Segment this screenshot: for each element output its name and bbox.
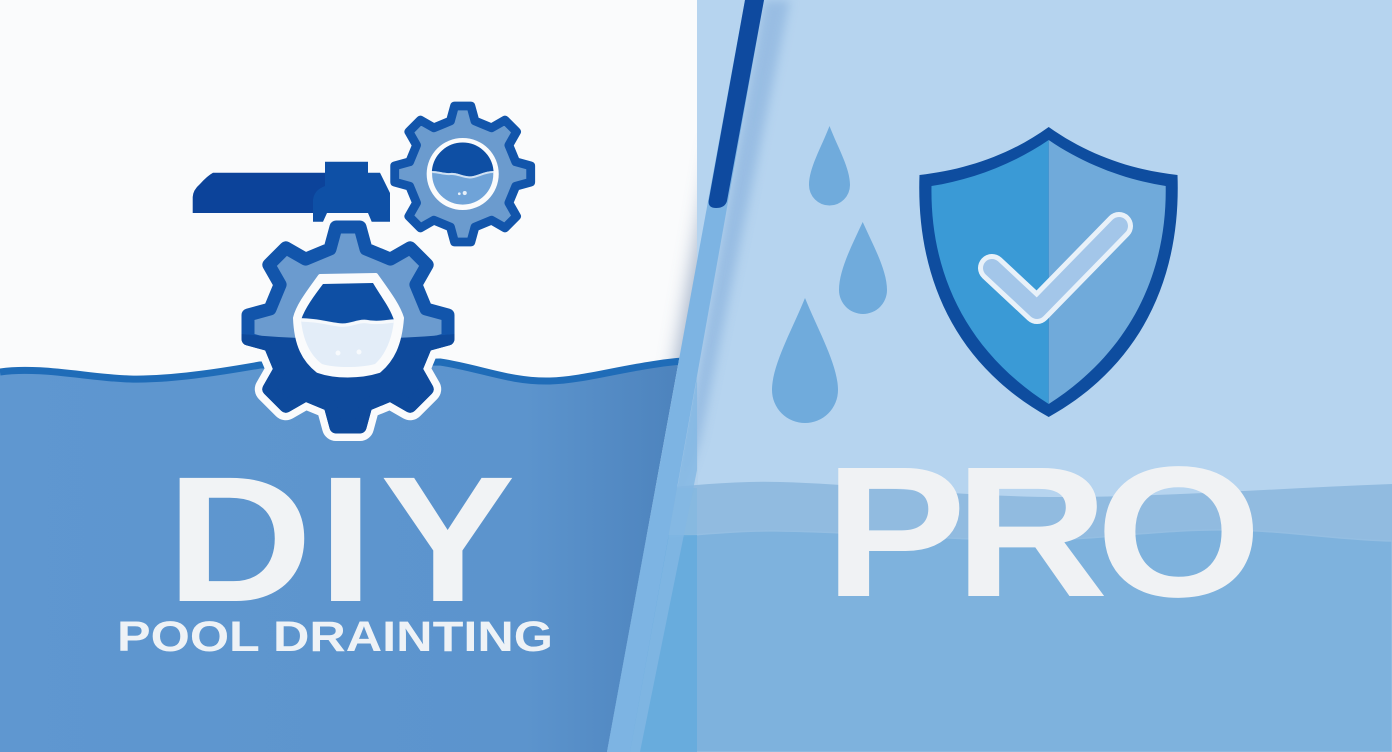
icon: shield with check [919,127,1178,417]
faint band strip [630,378,697,752]
small drop [809,126,850,206]
dark bar on divider [709,0,764,208]
check mark [992,226,1119,310]
valve body [313,162,390,222]
panel: DIY background [0,0,697,752]
lens bubbles [458,191,467,195]
title: DIY: DIY [166,439,516,639]
light water strip left of the panel seam [684,488,697,535]
gear lens ring [427,138,499,210]
lens white ring [295,275,402,376]
gear lower body [242,334,454,434]
diagonal divider band [607,0,764,752]
medium drop [839,222,887,314]
lens dark top [302,283,394,324]
lens water [301,318,394,367]
white outline on water [254,358,442,441]
lens wave highlight [295,320,401,325]
subtitle: pool drainting: POOL DRAINTING [117,613,553,661]
water body [0,360,700,752]
shield right half [1049,140,1166,404]
check fill [992,226,1119,310]
icon: large gear [248,227,448,427]
gear upper body [248,227,448,427]
icon: small gear [395,106,531,242]
panel: PRO background [697,0,1392,752]
saturated water strip left of the panel seam [630,535,697,752]
lens wave highlight [432,172,493,177]
lens water [432,143,493,205]
lens dark top [432,143,493,176]
panel: DIY water [0,360,700,752]
large drop [772,298,838,423]
gear rim [395,106,531,242]
shield left half [931,140,1049,404]
divider shadow on white panel [664,174,697,359]
icon: water drops [772,126,887,423]
front water wave [697,530,1391,751]
check outline [992,226,1119,310]
back water wave [647,482,1392,540]
lens bubbles [336,350,362,356]
handle arm [193,173,330,213]
icon: valve handle [193,162,390,222]
title: PRO: PRO [824,429,1262,636]
panel: PRO water [600,0,1392,752]
light fill right of the band below the seam [656,361,697,487]
shield border [919,127,1178,417]
shadow right of the band [682,0,792,463]
lens contents [301,283,394,367]
shadow left of the bar [670,0,745,300]
water surface line [0,360,700,381]
